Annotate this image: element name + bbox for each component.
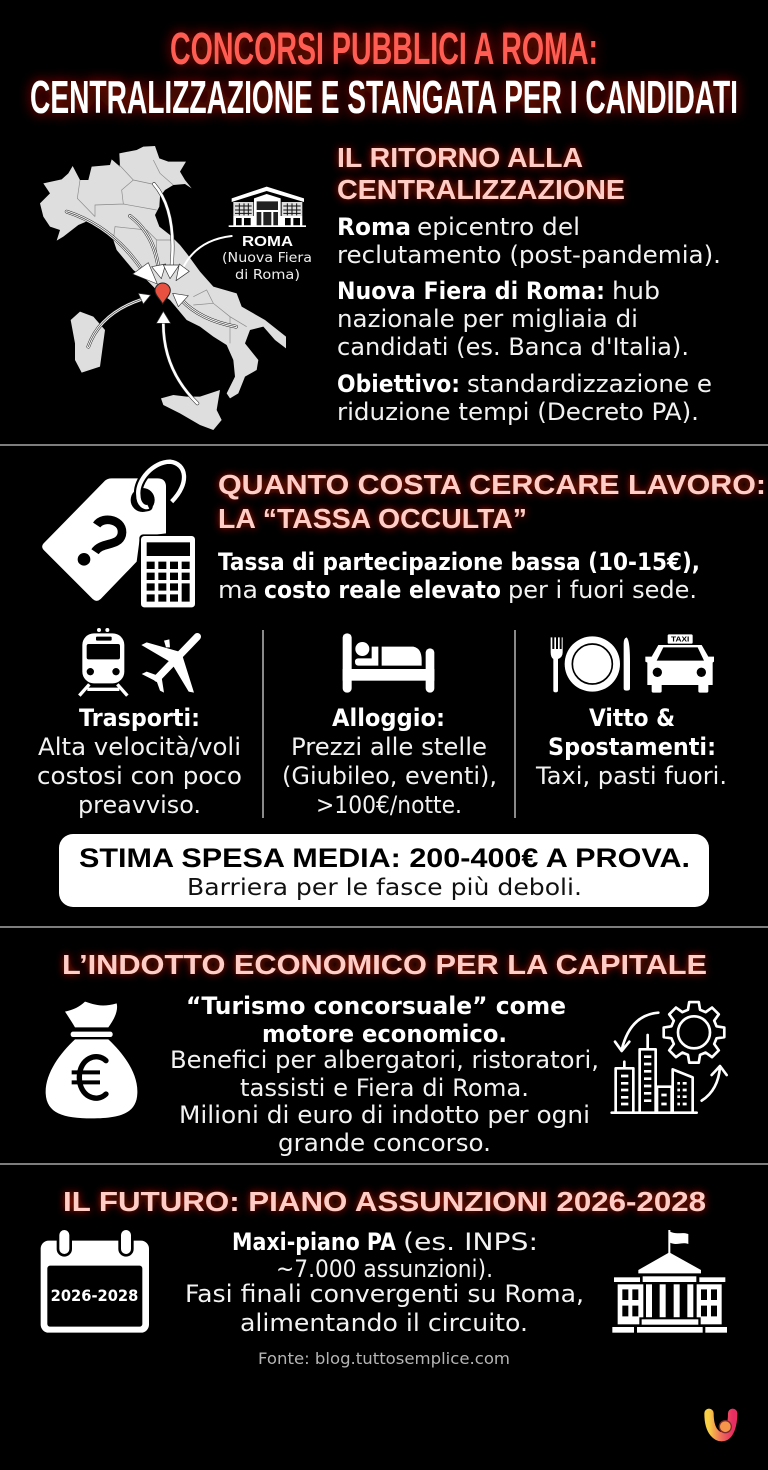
column: trasporti: preavviso. — [78, 791, 201, 819]
arrow: from Sicilia — [156, 311, 197, 403]
column: trasporti: Alta velocità/voli — [38, 733, 241, 761]
arrow: from Piemonte — [67, 212, 157, 284]
column: alloggio: Prezzi alle stelle — [291, 733, 487, 761]
column: vitto e spostamenti: Spostamenti: — [548, 733, 716, 761]
callout: estimated average cost: Barriera per le fasce più deboli. — [187, 875, 582, 901]
heading: indotto economico: L’INDOTTO ECONOMICO PER LA CAPITALE — [62, 949, 707, 980]
arrow: from Emilia — [130, 216, 166, 279]
map label: Roma: di Roma) — [235, 268, 300, 283]
column: vitto e spostamenti: Taxi, pasti fuori. — [535, 762, 727, 790]
text: centralizzazione details: riduzione tempi (Decreto PA). — [337, 398, 699, 426]
icon: red location pin — [155, 283, 170, 304]
text: maxi-piano PA: alimentando il circuito. — [240, 1309, 528, 1337]
text: centralizzazione details: reclutamento (post-pandemia). — [337, 241, 721, 269]
source line: Fonte: blog.tuttosemplice.com — [258, 1349, 510, 1368]
icon: train and plane — [79, 628, 197, 696]
icon: cutlery plate and taxi: TAXI — [671, 635, 689, 644]
arrow: from Veneto — [154, 184, 179, 279]
arrow: from Puglia — [173, 293, 236, 327]
column: alloggio: (Giubileo, eventi), — [282, 762, 497, 790]
column: trasporti: Trasporti: — [79, 704, 200, 732]
column: alloggio: >100€/notte. — [316, 791, 462, 819]
icon: government building — [612, 1230, 727, 1333]
icon: calendar 2026-2028 — [41, 1229, 149, 1333]
text: centralizzazione details — [337, 213, 721, 426]
text: maxi-piano PA: Fasi finali convergenti su Roma, — [185, 1280, 584, 1308]
heading: il futuro: IL FUTURO: PIANO ASSUNZIONI 2026-2028 — [63, 1186, 706, 1217]
text: hidden cost summary: per i fuori sede. — [508, 576, 697, 604]
title — [30, 23, 738, 123]
heading: quanto costa cercare lavoro: LA “TASSA OCCULTA” — [218, 503, 527, 534]
text: turismo concorsuale: tassisti e Fiera di Roma. — [240, 1074, 529, 1102]
heading: il ritorno alla centralizzazione: IL RITORNO ALLA — [337, 142, 583, 173]
text: hidden cost summary: costo reale elevato — [264, 576, 501, 604]
icon: cutlery plate and taxi — [551, 634, 714, 693]
text: turismo concorsuale: “Turismo concorsuale” come — [186, 992, 566, 1020]
callout: estimated average cost — [59, 834, 709, 907]
text: hidden cost summary: Tassa di partecipazione bassa (10-15€), — [218, 548, 700, 576]
column: vitto e spostamenti — [535, 704, 727, 790]
heading: il ritorno alla centralizzazione — [337, 142, 625, 205]
map label: Roma — [222, 233, 312, 283]
column: trasporti: costosi con poco — [37, 762, 242, 790]
text: turismo concorsuale: Milioni di euro di indotto per ogni — [179, 1101, 590, 1129]
heading: quanto costa cercare lavoro — [218, 469, 766, 534]
text: centralizzazione details: hub — [612, 277, 660, 305]
column: alloggio — [282, 704, 497, 819]
text: centralizzazione details: nazionale per migliaia di — [337, 305, 638, 333]
map label: Roma: ROMA — [242, 233, 293, 250]
text: centralizzazione details: Roma — [337, 213, 411, 241]
text: centralizzazione details: Nuova Fiera di Roma: — [337, 277, 605, 305]
text: maxi-piano PA — [185, 1228, 584, 1337]
heading: quanto costa cercare lavoro: QUANTO COSTA CERCARE LAVORO: — [218, 469, 766, 500]
text: centralizzazione details: standardizzazione e — [467, 370, 712, 398]
icon: logo — [709, 1413, 733, 1437]
column: vitto e spostamenti: Vitto & — [589, 704, 675, 732]
column: trasporti — [37, 704, 242, 819]
heading: il ritorno alla centralizzazione: CENTRALIZZAZIONE — [337, 174, 625, 205]
icon: bed — [343, 633, 434, 693]
icon: city and gear — [612, 1002, 727, 1113]
text: maxi-piano PA: Maxi-piano PA — [232, 1228, 396, 1256]
text: maxi-piano PA: (es. INPS: — [403, 1228, 538, 1256]
text: turismo concorsuale — [170, 992, 599, 1157]
icon: price tag with calculator — [42, 462, 197, 609]
text: hidden cost summary — [218, 548, 700, 604]
arrow: callout to Roma label — [176, 236, 232, 281]
column: alloggio: Alloggio: — [332, 704, 445, 732]
arrow: from Sardegna — [88, 293, 151, 347]
icon: calendar 2026-2028: 2026-2028 — [51, 1286, 138, 1305]
icon: money bag — [46, 1002, 137, 1118]
text: centralizzazione details: epicentro del — [417, 213, 580, 241]
text: hidden cost summary: ma — [218, 576, 258, 604]
map of Italy with arrows to Rome — [40, 146, 306, 430]
text: turismo concorsuale: motore economico. — [262, 1020, 507, 1048]
text: centralizzazione details: candidati (es. Banca d'Italia). — [337, 333, 689, 361]
text: turismo concorsuale: grande concorso. — [278, 1129, 491, 1157]
callout: estimated average cost: STIMA SPESA MEDIA: 200-400€ A PROVA. — [79, 843, 690, 873]
text: turismo concorsuale: Benefici per albergatori, ristoratori, — [170, 1046, 599, 1074]
text: centralizzazione details: Obiettivo: — [337, 370, 460, 398]
map label: Roma: (Nuova Fiera — [222, 251, 312, 266]
icon: exhibition hall — [229, 187, 306, 227]
text: maxi-piano PA: ~7.000 assunzioni). — [276, 1255, 493, 1283]
